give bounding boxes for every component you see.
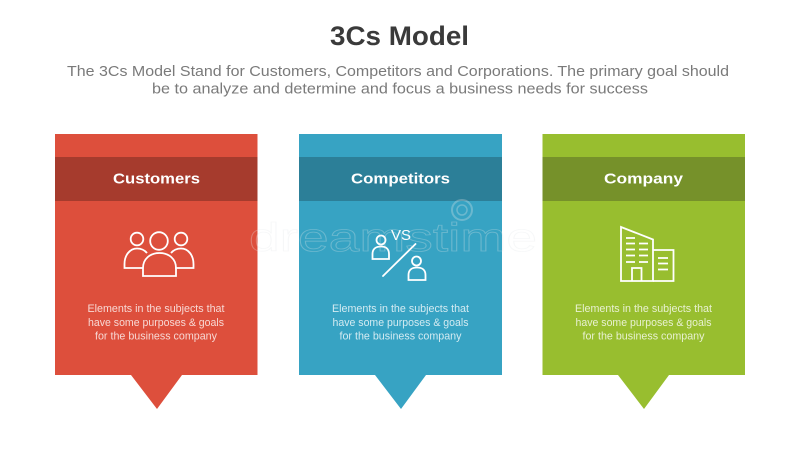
description: competitors: Elements in the subjects that [332,303,469,315]
description: customers [88,303,224,342]
callout shape: competitors [299,134,502,409]
heading: customers: Customers [113,170,200,188]
icon: office buildings [621,227,674,281]
callout shape: customers [55,134,258,409]
panel: company [542,134,745,409]
watermark [249,200,537,260]
description: customers: Elements in the subjects that [88,303,224,315]
subtitle: The 3Cs Model Stand for Customers, Competitors and Corporations. The primary goal should [67,64,729,80]
watermark: dreamstime [249,216,537,260]
description: competitors: for the business company [340,330,462,342]
description: competitors [332,303,469,342]
header band: competitors [299,157,502,201]
heading: company: Company [604,170,684,188]
header band: company [542,157,745,201]
panel: customers [55,134,258,409]
description: customers: for the business company [95,330,217,342]
icon: person versus person: VS [391,227,411,244]
callout shape: company [542,134,745,409]
description: customers: have some purposes & goals [88,317,224,329]
description: company: Elements in the subjects that [575,303,712,315]
title: 3Cs Model [330,21,469,51]
panel: competitors [299,134,502,409]
description: company: have some purposes & goals [576,317,712,329]
heading: competitors: Competitors [351,170,450,188]
subtitle [67,64,729,98]
icon: group of people [124,232,194,276]
header band: customers [55,157,258,201]
description: company [575,303,712,342]
description: competitors: have some purposes & goals [332,317,469,329]
description: company: for the business company [582,330,705,342]
subtitle: be to analyze and determine and focus a business needs for success [152,82,648,98]
icon: person versus person [372,227,426,280]
